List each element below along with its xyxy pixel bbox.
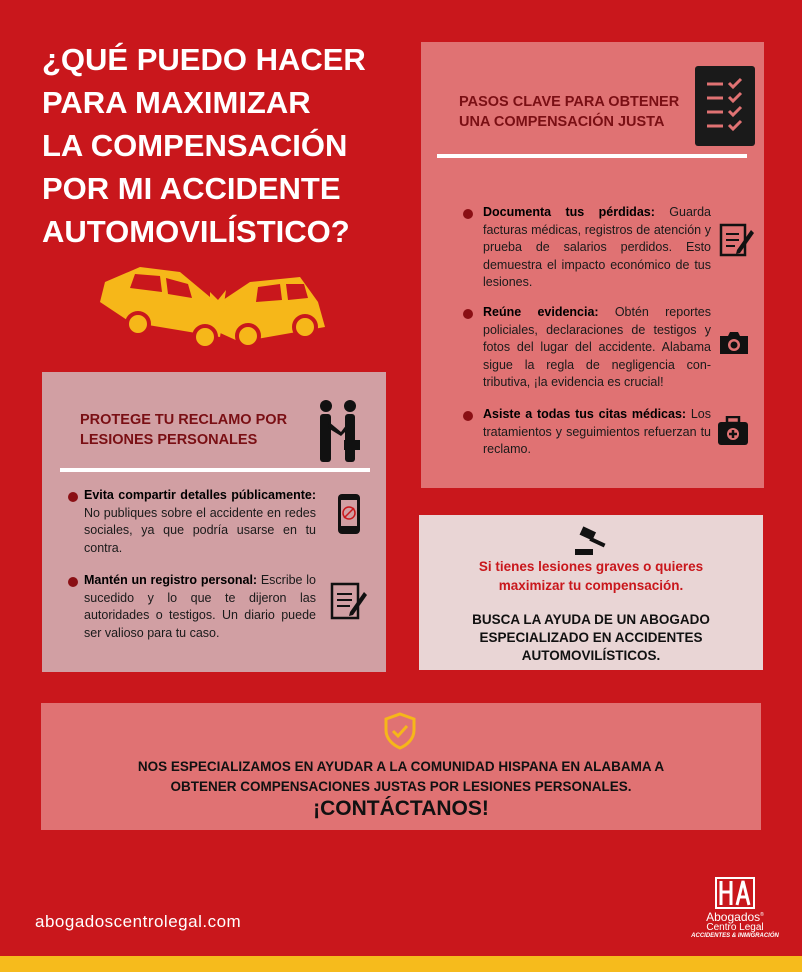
title: ¿QUÉ PUEDO HACER — [42, 42, 366, 77]
icon: handshake — [320, 400, 360, 462]
logo — [691, 877, 779, 939]
icon: shield — [384, 712, 416, 750]
panel: abogado callout — [419, 515, 763, 670]
icon: camera — [720, 332, 748, 354]
website: abogadoscentrolegal.com — [35, 912, 241, 931]
text: nos especializamos: NOS ESPECIALIZAMOS EN AYUDAR A LA COMUNIDAD HISPANA EN ALABAMA A — [138, 759, 664, 774]
icon: checklist — [695, 66, 755, 146]
heading — [80, 412, 287, 448]
item: reune evidencia: Reúne evidencia: Obtén reportes policiales, declaraciones de testigos y fotos del lugar del accidente. Alaba­ma sigue la regla de negligencia con­tributiva, ¡la evidencia es crucial! — [483, 305, 711, 389]
heading: PROTEGE TU RECLAMO POR — [80, 412, 287, 428]
title: POR MI ACCIDENTE — [42, 171, 341, 206]
title: PARA MAXIMIZAR — [42, 85, 311, 120]
logo: Abogados® — [706, 910, 764, 924]
icon: phone — [338, 494, 360, 534]
icon: car crash — [100, 267, 325, 346]
item: evita compartir: Evita compartir detalles pública­mente: No publiques sobre el acciden­te en redes sociales, ya que podría usarse en tu contra. — [84, 488, 316, 554]
text: nos especializamos: OBTENER COMPENSACIONES JUSTAS POR LESIONES PERSONALES. — [170, 779, 632, 794]
panel: pasos clave — [421, 42, 764, 488]
panel: bottom banner — [41, 703, 761, 830]
item: citas medicas: Asiste a todas tus citas médicas: Los tratamientos y seguimientos refuerzan tu reclamo. — [483, 407, 711, 456]
text: si tienes lesiones — [479, 559, 703, 593]
text: busca ayuda: BUSCA LA AYUDA DE UN ABOGADO — [472, 612, 710, 627]
text: si tienes lesiones: maximizar tu compensación. — [499, 578, 683, 593]
heading — [459, 94, 679, 130]
logo: ACCIDENTES & INMIGRACIÓN — [691, 933, 779, 939]
text: si tienes lesiones: Si tienes lesiones graves o quieres — [479, 559, 703, 574]
heading: PASOS CLAVE PARA OBTENER — [459, 94, 679, 110]
title — [42, 42, 366, 249]
text: busca ayuda — [472, 612, 710, 663]
panel: protege tu reclamo — [42, 372, 386, 672]
logo: Centro Legal — [706, 922, 764, 933]
text: nos especializamos — [138, 759, 664, 794]
text: busca ayuda: ESPECIALIZADO EN ACCIDENTES — [479, 630, 703, 645]
icon: medkit — [718, 416, 748, 445]
heading: UNA COMPENSACIÓN JUSTA — [459, 114, 664, 130]
icon: document pen — [330, 582, 367, 620]
item: registro personal: Mantén un registro personal: Escri­be lo sucedido y lo que te dijeron las autoridades o testigos. Un diario puede ser valioso para tu caso. — [84, 573, 316, 640]
icon: gavel — [575, 526, 606, 555]
item: documenta: Documenta tus pérdidas: Guarda facturas médicas, registros de aten­ción y prueba de salarios perdidos. Esto demuestra el impacto económi­co de tus lesiones. — [483, 205, 711, 289]
text: busca ayuda: AUTOMOVILÍSTICOS. — [522, 648, 660, 663]
yellow footer bar — [0, 956, 802, 972]
heading: LESIONES PERSONALES — [80, 432, 257, 448]
title: LA COMPENSACIÓN — [42, 128, 347, 163]
text: contactanos: ¡CONTÁCTANOS! — [313, 797, 489, 820]
title: AUTOMOVILÍSTICO? — [42, 214, 350, 249]
icon: notepad — [720, 224, 754, 256]
